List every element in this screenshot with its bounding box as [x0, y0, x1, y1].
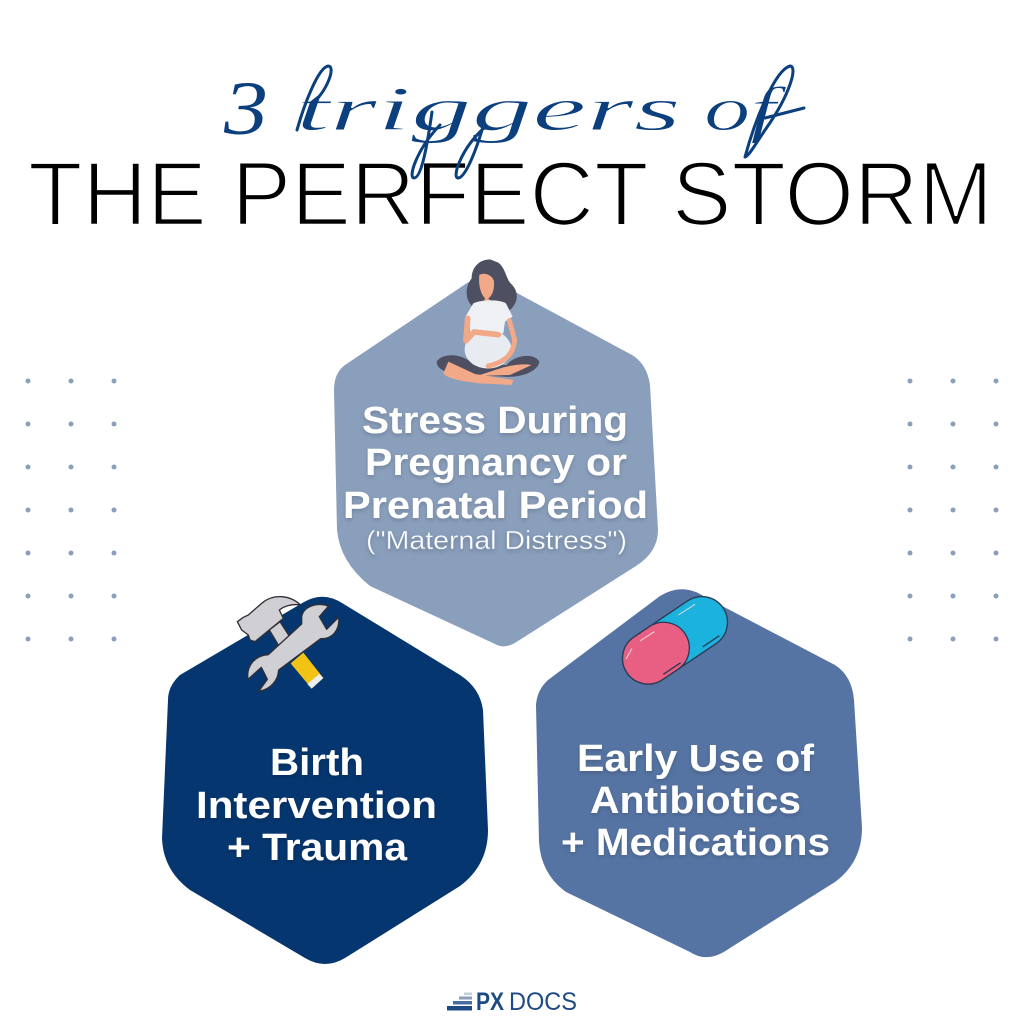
panel text: antibiotics: Early Use of: [577, 738, 814, 780]
panel text: stress: [343, 400, 648, 555]
hexagon: bottom left: [162, 597, 488, 964]
dot grid: right: [908, 378, 998, 642]
hexagon: bottom right: [536, 589, 862, 957]
title: script line: of: [704, 76, 788, 144]
title: main heading: THE PERFECT STORM: [28, 144, 993, 245]
panel text: birth: + Trauma: [227, 827, 408, 869]
title: script line: [223, 66, 804, 178]
logo icon: stairs: [447, 992, 472, 1010]
panel text: stress: Pregnancy or: [365, 442, 627, 484]
hexagon: top: [334, 279, 658, 646]
dot grid: left: [26, 378, 116, 642]
icon: pill capsule: [613, 587, 737, 694]
logo: PX DOCS: [447, 988, 577, 1016]
icon: pregnant woman: [437, 259, 539, 385]
title: script line: 3: [223, 67, 268, 151]
panel text: stress: Prenatal Period: [343, 485, 648, 527]
logo text: PX: [476, 988, 504, 1016]
panel: stress during pregnancy: [334, 259, 658, 646]
panel text: birth: Intervention: [196, 785, 437, 827]
icon: hammer and wrench: [237, 597, 339, 691]
panel text: stress: ("Maternal Distress"): [366, 525, 627, 555]
panel: antibiotics: [536, 587, 862, 957]
panel: birth intervention: [162, 597, 488, 964]
panel text: antibiotics: [561, 738, 830, 864]
logo text: DOCS: [509, 988, 577, 1016]
panel text: antibiotics: + Medications: [561, 822, 830, 864]
panel text: stress: Stress During: [362, 400, 628, 442]
panel text: antibiotics: Antibiotics: [590, 780, 801, 822]
panel text: birth: [196, 742, 437, 869]
panel text: birth: Birth: [270, 742, 364, 784]
title: script line: triggers: [296, 76, 681, 144]
